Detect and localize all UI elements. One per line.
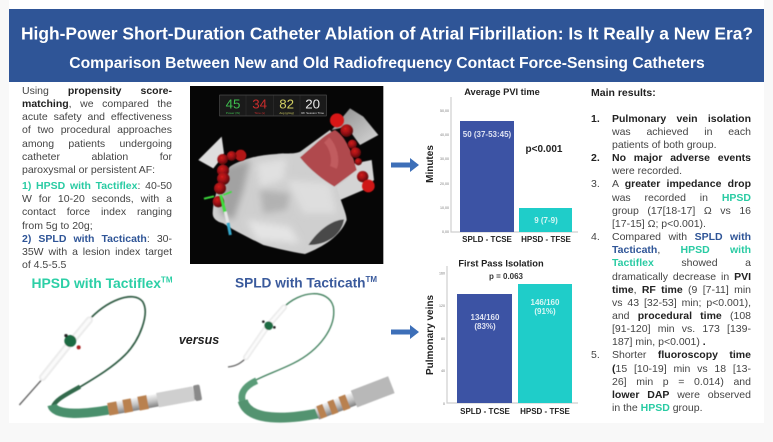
ablation lesion markers	[213, 113, 375, 207]
axis ticks: 40,00	[440, 133, 449, 137]
bar chart: first pass isolation	[425, 258, 578, 416]
axis ticks: 30,00	[440, 157, 449, 161]
text block: study introduction: of 4.5-5.5	[22, 259, 66, 271]
text block: study introduction: 2) SPLD with Tacticath: 30-	[22, 233, 172, 245]
result 1: patients of both group.	[612, 139, 716, 151]
map readout panel: 45	[226, 97, 240, 112]
result 2: were recorded.	[612, 165, 682, 177]
arrow to PVI time chart	[391, 158, 419, 172]
text block: study introduction: W for 10-20 seconds, with a	[22, 193, 172, 205]
axes	[451, 97, 578, 232]
axis title: Pulmonary veins	[425, 295, 436, 375]
bar: SPLD - TCSE: (83%)	[474, 322, 496, 331]
bar: HPSD - TFSE: (91%)	[534, 307, 556, 316]
text block: study introduction: matching, we compared the	[22, 98, 172, 110]
result 1: was achieved in each	[612, 126, 751, 138]
bar chart: average PVI time	[425, 87, 578, 244]
category labels: HPSD - TFSE	[521, 235, 572, 244]
bar: SPLD - TCSE	[460, 121, 514, 232]
left atrium surface	[198, 108, 378, 254]
axis ticks: 120	[439, 304, 445, 308]
chart title: Average PVI time	[464, 87, 540, 97]
map readout panel: 82	[279, 97, 294, 112]
result 2	[591, 152, 751, 177]
result 4: Tacticath, HPSD with	[612, 244, 751, 256]
axis ticks: 50,00	[440, 109, 449, 113]
category labels: SPLD - TCSE	[460, 407, 511, 416]
map readout panel: 34	[252, 97, 268, 112]
result 3: A greater impedance drop	[612, 178, 751, 190]
result 3: was recorded in HPSD	[612, 192, 751, 204]
result 5: 26] min p = 0.014) and	[612, 376, 751, 388]
text block: main results	[591, 86, 751, 414]
map readout panel: Power (W)	[226, 111, 240, 115]
result 4: vs 43 [32-53] min; p<0.001),	[612, 297, 751, 309]
text block: study introduction: from 5g to 20g;	[22, 220, 93, 232]
map readout panel: 20	[305, 97, 320, 112]
text block: study introduction: Using propensity score-	[22, 85, 172, 97]
category labels	[460, 407, 571, 416]
axis ticks: 0,00	[442, 230, 449, 234]
result 4: Compared with SPLD with	[612, 231, 751, 243]
bar: SPLD - TCSE	[457, 294, 512, 403]
result 4: Tactiflex showed a	[612, 257, 751, 269]
p value: p<0.001	[526, 144, 563, 155]
result 2: No major adverse events	[612, 152, 751, 164]
electroanatomic map image	[190, 86, 384, 264]
catheter: Tacticath	[228, 294, 395, 422]
text block: study introduction: contact force index ranging	[22, 206, 172, 218]
result 5: Shorter fluoroscopy time	[612, 349, 751, 361]
map catheter	[204, 192, 232, 235]
axis ticks: 80	[441, 337, 445, 341]
heading: HPSD catheter: HPSD with TactiflexTM	[32, 275, 172, 291]
axes	[447, 266, 578, 403]
subtitle: Comparison Between New and Old Radiofrequency Contact Force-Sensing Catheters	[69, 55, 705, 72]
result 2: 2.	[591, 152, 600, 164]
text block: study introduction: catheter ablation for	[22, 151, 172, 163]
versus label: versus	[179, 333, 219, 347]
result 4: [91-120] min vs. 173 [139-	[612, 323, 751, 335]
category labels: HPSD - TFSE	[520, 407, 571, 416]
axis ticks: 40	[441, 369, 445, 373]
result 5: 5.	[591, 349, 600, 361]
catheter: Tactiflex	[19, 297, 202, 417]
axis ticks: 0	[443, 402, 445, 406]
result 3	[591, 178, 751, 230]
map readout panel: RF Session Time	[301, 111, 324, 115]
text block: study introduction: acute safety and effectiveness	[22, 111, 172, 123]
axis ticks: 160	[439, 272, 445, 276]
result 4: time, RF time (9 [7-11] min	[612, 284, 751, 296]
text block: study introduction: paroxysmal or persistent AF:	[22, 164, 155, 176]
result 5	[591, 349, 751, 414]
bar: HPSD - TFSE	[519, 208, 572, 232]
map readout panel: Avg (g/mg)	[279, 111, 294, 115]
result 4	[591, 231, 751, 348]
text block: study introduction: among patients undergoing	[22, 138, 172, 150]
results heading: Main results:	[591, 86, 656, 98]
result 1: 1.	[591, 113, 600, 125]
result 4: 187] min, p<0.001) .	[612, 336, 706, 348]
bar: HPSD - TFSE: 146/160	[531, 298, 560, 307]
result 3: 3.	[591, 178, 600, 190]
bar: SPLD - TCSE: 50 (37-53:45)	[463, 130, 512, 139]
catheter illustrations	[18, 292, 395, 424]
map readout panel	[220, 95, 326, 116]
result 1	[591, 113, 751, 151]
category labels: SPLD - TCSE	[462, 235, 513, 244]
axis ticks	[440, 109, 449, 234]
text block: study introduction: 1) HPSD with Tactiflex: 40-50	[22, 180, 172, 192]
category labels	[462, 235, 572, 244]
result 3: group (17[18-17] Ω vs 16	[612, 205, 751, 217]
map readout panel: Time (s)	[254, 111, 265, 115]
text block: study introduction	[22, 85, 172, 271]
result 5: (15 [10-19] min vs 18 [13-	[612, 363, 751, 375]
axis ticks: 20,00	[440, 182, 449, 186]
bar: HPSD - TFSE	[518, 284, 572, 403]
result 4: 4.	[591, 231, 600, 243]
text block: study introduction: of two procedural approaches	[22, 124, 172, 136]
axis title: Minutes	[425, 145, 436, 183]
axis ticks: 10,00	[440, 206, 449, 210]
result 5: lower DAP were observed	[612, 389, 751, 401]
bar: HPSD - TFSE: 9 (7-9)	[534, 216, 558, 225]
main title: High-Power Short-Duration Catheter Ablation of Atrial Fibrillation: Is It Really a New Era?	[21, 24, 753, 44]
result 4: dramatically decrease in PVI	[612, 271, 751, 283]
bar: SPLD - TCSE: 134/160	[471, 313, 500, 322]
text block: study introduction: 35W with a lesion index target	[22, 246, 172, 258]
chart title: First Pass Isolation	[458, 258, 544, 268]
result 3: [17-15] Ω; p<0.001).	[612, 218, 706, 230]
title banner	[9, 9, 764, 82]
p value: p = 0.063	[489, 272, 524, 281]
result 5: in the HPSD group.	[612, 402, 702, 414]
arrow to first pass chart	[391, 325, 419, 339]
heading: SPLD catheter: SPLD with TacticathTM	[235, 275, 377, 290]
axis ticks	[439, 272, 445, 406]
result 4: and procedural time (108	[612, 310, 751, 322]
result 1: Pulmonary vein isolation	[612, 113, 751, 125]
